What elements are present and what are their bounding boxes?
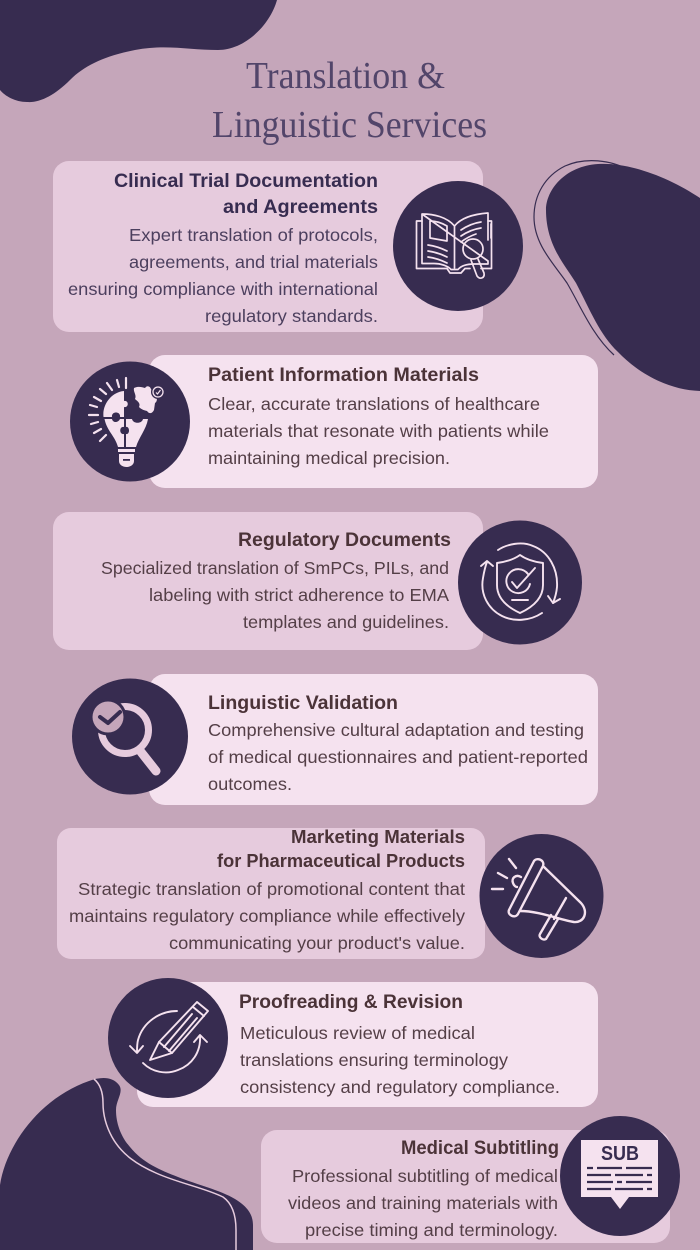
text: proofreading description (240, 1023, 560, 1097)
heading: medical subtitling: Medical Subtitling (401, 1138, 559, 1159)
text: regulatory description: Specialized translation of SmPCs, PILs, and (101, 558, 449, 578)
text: linguistic validation description (208, 720, 588, 794)
heading: proofreading and revision: Proofreading & Revision (239, 992, 463, 1013)
icon: light bulb with puzzle pieces (70, 362, 190, 482)
text: linguistic validation description: outcomes. (208, 774, 292, 794)
icon: subtitle speech bubble (560, 1116, 680, 1236)
text: clinical trial description: ensuring compliance with international (68, 279, 378, 299)
heading: marketing materials (217, 827, 465, 871)
text: marketing description: communicating your product's value. (169, 933, 465, 953)
panel: medical subtitling (261, 1116, 680, 1243)
text: medical subtitling description: precise timing and terminology. (305, 1220, 558, 1240)
blob: top left (0, 0, 277, 102)
text: regulatory description: templates and guidelines. (243, 612, 449, 632)
panel: clinical trial documentation (53, 161, 523, 332)
text: proofreading description: translations ensuring terminology (240, 1050, 508, 1070)
icon: megaphone (480, 834, 604, 958)
panel: linguistic validation (72, 674, 598, 805)
text: clinical trial description: regulatory standards. (205, 306, 378, 326)
text: regulatory description: labeling with strict adherence to EMA (149, 585, 449, 605)
icon: subtitle speech bubble: SUB (601, 1143, 639, 1165)
text: linguistic validation description: of medical questionnaires and patient-reported (208, 747, 588, 767)
panel: proofreading and revision (108, 978, 598, 1107)
icon: shield with check (458, 520, 582, 644)
text: patient information description (208, 394, 549, 468)
text: linguistic validation description: Comprehensive cultural adaptation and testing (208, 720, 584, 740)
text: clinical trial description: Expert translation of protocols, (129, 225, 378, 245)
heading: clinical trial documentation: and Agreements (223, 197, 378, 218)
text: marketing description (69, 879, 465, 953)
title: Linguistic Services (212, 104, 487, 146)
text: marketing description: Strategic translation of promotional content that (78, 879, 465, 899)
heading: linguistic validation: Linguistic Validation (208, 693, 398, 714)
icon: book with magnifier (393, 181, 523, 311)
panel: patient information materials (70, 355, 598, 488)
text: clinical trial description (68, 225, 378, 326)
title (212, 55, 487, 146)
panel: regulatory documents (53, 512, 582, 650)
heading: clinical trial documentation (114, 171, 378, 218)
text: proofreading description: Meticulous review of medical (240, 1023, 475, 1043)
blob: right with outline (534, 161, 700, 391)
heading: marketing materials: for Pharmaceutical Products (217, 851, 465, 871)
heading: clinical trial documentation: Clinical Trial Documentation (114, 171, 378, 192)
text: patient information description: maintaining medical precision. (208, 448, 450, 468)
heading: patient information materials: Patient Information Materials (208, 365, 479, 386)
heading: regulatory documents: Regulatory Documents (238, 530, 451, 551)
text: patient information description: materials that resonate with patients while (208, 421, 549, 441)
text: medical subtitling description: videos and training materials with (288, 1193, 558, 1213)
text: medical subtitling description (288, 1166, 558, 1240)
text: patient information description: Clear, accurate translations of healthcare (208, 394, 540, 414)
text: clinical trial description: agreements, and trial materials (129, 252, 378, 272)
title: Translation & (246, 55, 445, 97)
blob: bottom left with outline (0, 1078, 253, 1250)
text: regulatory description (101, 558, 449, 632)
icon: pencil with revision arrows (108, 978, 228, 1098)
icon: magnifier with check (72, 678, 188, 794)
panel: marketing materials (57, 827, 604, 959)
text: medical subtitling description: Professional subtitling of medical (292, 1166, 558, 1186)
text: proofreading description: consistency and regulatory compliance. (240, 1077, 560, 1097)
text: marketing description: maintains regulatory compliance while effectively (69, 906, 465, 926)
heading: marketing materials: Marketing Materials (291, 827, 465, 847)
